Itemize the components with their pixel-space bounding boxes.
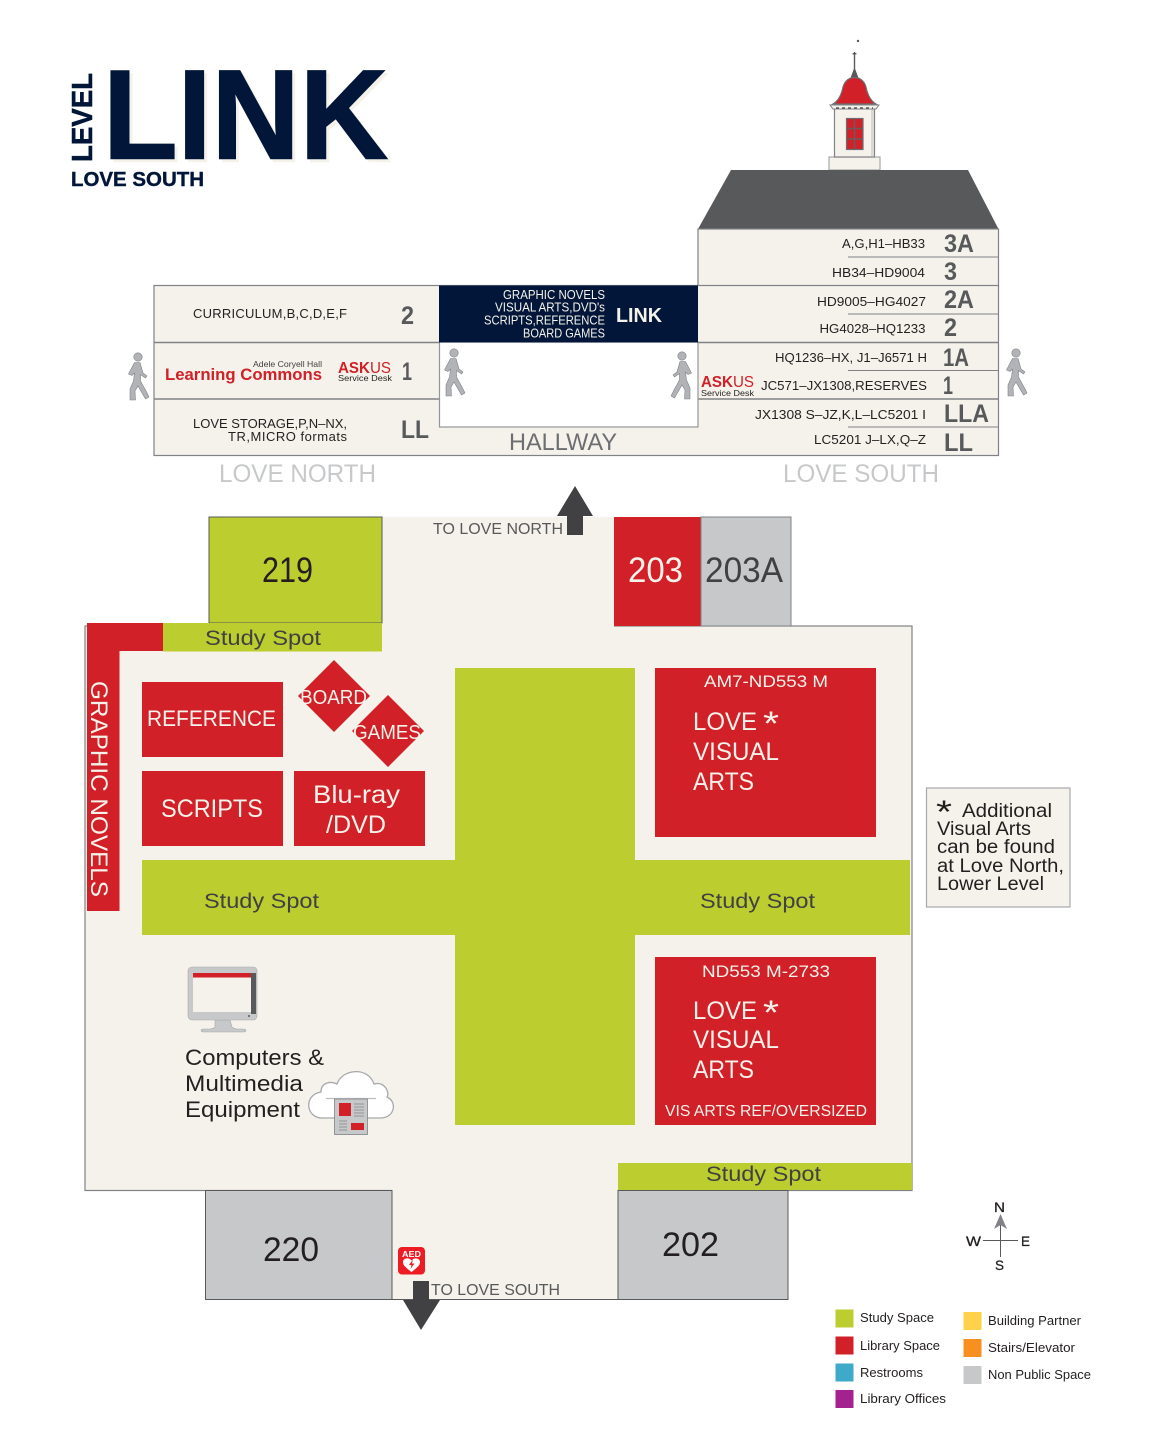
icon: walker hall left	[444, 349, 465, 396]
room 220	[206, 1190, 392, 1300]
love north rows: LL	[401, 416, 429, 444]
legend: Stairs/Elevator	[988, 1341, 1075, 1355]
legend: Non Public Space	[988, 1368, 1091, 1382]
room 203A	[701, 517, 791, 626]
icon: walker right	[1006, 349, 1027, 396]
icon: cloud document	[309, 1072, 393, 1134]
love south rows: JX1308 S–JZ,K,L–LC5201 I	[755, 407, 926, 422]
visual arts lower: ND553 M-2733	[702, 962, 830, 981]
icon: computer	[188, 967, 257, 1032]
visual arts lower: ARTS	[693, 1056, 754, 1084]
love south rows: JC571–JX1308,RESERVES	[761, 378, 927, 393]
study area cross: Study Spot	[700, 890, 815, 913]
scripts shelf	[142, 771, 283, 846]
love south rows: 3A	[944, 230, 974, 258]
room 219: 219	[262, 551, 313, 590]
blu-ray dvd shelf: Blu-ray	[313, 781, 401, 809]
love north rows: 2	[401, 302, 414, 330]
love south rows: HG4028–HQ1233	[820, 321, 926, 336]
hallway label: HALLWAY	[509, 429, 617, 456]
arrow: to love north	[557, 486, 593, 535]
link floor shelf list: VISUAL ARTS,DVD's	[495, 300, 605, 314]
love south rows: LLA	[944, 400, 989, 428]
link floor shelf list	[484, 288, 605, 340]
love north rows: Service Desk	[338, 373, 393, 383]
callout: additional visual arts	[926, 788, 1070, 907]
room 203A: 203A	[705, 551, 784, 590]
label: LOVE NORTH: LOVE NORTH	[219, 460, 376, 488]
love south rows: Service Desk	[701, 388, 755, 398]
panel: floor plan	[85, 486, 912, 1330]
visual arts lower: *	[763, 994, 779, 1032]
board diamond	[298, 660, 370, 732]
visual arts lower: VIS ARTS REF/OVERSIZED	[665, 1103, 867, 1120]
visual arts upper: *	[763, 705, 779, 743]
label: LOVE SOUTH: LOVE SOUTH	[783, 460, 939, 488]
icon: cupola	[829, 40, 880, 170]
love south rows: A,G,H1–HB33	[842, 236, 925, 251]
icon: AED: AED	[402, 1249, 421, 1259]
visual arts upper: VISUAL	[693, 738, 779, 766]
callout: additional visual arts: Lower Level	[937, 874, 1044, 895]
legend: Library Offices	[860, 1392, 946, 1406]
love north rows: ASKUS	[338, 360, 391, 377]
visual arts upper	[655, 668, 876, 837]
callout: additional visual arts: Additional	[962, 801, 1052, 822]
compass	[966, 1199, 1030, 1273]
room 203: 203	[628, 551, 683, 590]
legend: Restrooms	[860, 1366, 923, 1380]
love south rows: 1A	[943, 344, 969, 372]
callout: additional visual arts: at Love North,	[937, 856, 1064, 877]
study area cross: Study Spot	[204, 890, 319, 913]
roof	[698, 170, 998, 229]
room 219	[209, 517, 382, 623]
study spot top: Study Spot	[205, 627, 321, 650]
icon: walker left	[128, 353, 149, 400]
panel: building cross-section	[154, 229, 998, 457]
callout: additional visual arts: can be found	[937, 837, 1055, 858]
love south rows: HQ1236–HX, J1–J6571 H	[775, 350, 927, 365]
love south rows: HD9005–HG4027	[817, 294, 926, 309]
text: computers and multimedia	[185, 1045, 324, 1122]
link floor shelf list: BOARD GAMES	[523, 326, 605, 340]
hallway box	[440, 342, 698, 427]
love south rows: LC5201 J–LX,Q–Z	[814, 432, 926, 447]
label: to love south: TO LOVE SOUTH	[431, 1282, 560, 1299]
icon: AED	[398, 1247, 425, 1274]
love south rows: HB34–HD9004	[832, 265, 925, 280]
heading: LOVE SOUTH: LOVE SOUTH	[71, 169, 204, 191]
callout: additional visual arts: Visual Arts	[937, 819, 1031, 840]
games diamond: GAMES	[353, 722, 421, 744]
love north rows: TR,MICRO formats	[228, 429, 348, 444]
room 220: 220	[263, 1231, 319, 1269]
link floor shelf list: SCRIPTS,REFERENCE	[484, 314, 605, 328]
visual arts lower	[655, 957, 876, 1125]
text: computers and multimedia: Equipment	[185, 1097, 300, 1122]
love south rows	[701, 230, 989, 457]
study spot top	[163, 623, 382, 652]
blu-ray dvd shelf	[294, 771, 425, 846]
compass: S	[995, 1257, 1004, 1273]
room 202: 202	[662, 1226, 719, 1264]
legend: Study Space	[860, 1311, 934, 1325]
compass: W	[966, 1233, 982, 1249]
link floor shelf list: GRAPHIC NOVELS	[503, 288, 605, 302]
text: computers and multimedia: Computers &	[185, 1045, 324, 1070]
title: LINK: LINK	[106, 46, 391, 188]
arrow: to love south	[403, 1281, 440, 1330]
study spot bottom: Study Spot	[706, 1163, 821, 1186]
room 203	[614, 517, 701, 626]
compass: E	[1021, 1233, 1030, 1249]
love south rows: 1	[943, 372, 953, 400]
study spot bottom	[618, 1163, 912, 1190]
heading: LEVEL vertical: LEVEL	[67, 73, 99, 162]
label: to love north: TO LOVE NORTH	[433, 521, 563, 538]
love north rows: LOVE STORAGE,P,N–NX,	[193, 416, 347, 431]
legend: Building Partner	[988, 1314, 1081, 1328]
love north rows	[165, 302, 429, 444]
legend: Library Space	[860, 1339, 940, 1353]
visual arts upper: LOVE	[693, 708, 757, 736]
legend	[836, 1310, 1091, 1408]
love north rows: Adele Coryell Hall	[253, 359, 322, 369]
link floor label: LINK	[616, 305, 663, 327]
visual arts upper: ARTS	[693, 768, 754, 796]
visual arts upper: AM7-ND553 M	[704, 672, 828, 691]
text: computers and multimedia: Multimedia	[185, 1071, 304, 1096]
scripts shelf: SCRIPTS	[161, 795, 263, 823]
love south rows: 3	[944, 258, 957, 286]
graphic novels shelf	[85, 623, 163, 911]
reference shelf: REFERENCE	[147, 706, 276, 731]
room 202	[618, 1190, 788, 1300]
love north rows: CURRICULUM,B,C,D,E,F	[193, 306, 347, 321]
graphic novels shelf: GRAPHIC NOVELS	[85, 681, 112, 897]
games diamond	[352, 695, 424, 767]
visual arts lower: VISUAL	[693, 1026, 779, 1054]
icon: walker hall right	[671, 352, 692, 399]
reference shelf	[142, 682, 283, 757]
love south rows: LL	[944, 429, 973, 457]
love north rows: 1	[402, 358, 412, 386]
compass: N	[994, 1199, 1005, 1215]
love south rows: 2	[944, 314, 957, 342]
link floor panel	[439, 286, 698, 342]
title: LINK: LINK	[103, 44, 388, 186]
love south rows: ASKUS	[701, 374, 754, 391]
callout: additional visual arts: *	[936, 794, 952, 830]
love north rows: Learning Commons	[165, 365, 322, 384]
blu-ray dvd shelf: /DVD	[326, 811, 386, 839]
study area cross	[142, 668, 910, 1125]
love south rows: 2A	[944, 286, 974, 314]
board diamond: BOARD	[300, 687, 367, 709]
visual arts lower: LOVE	[693, 997, 757, 1025]
